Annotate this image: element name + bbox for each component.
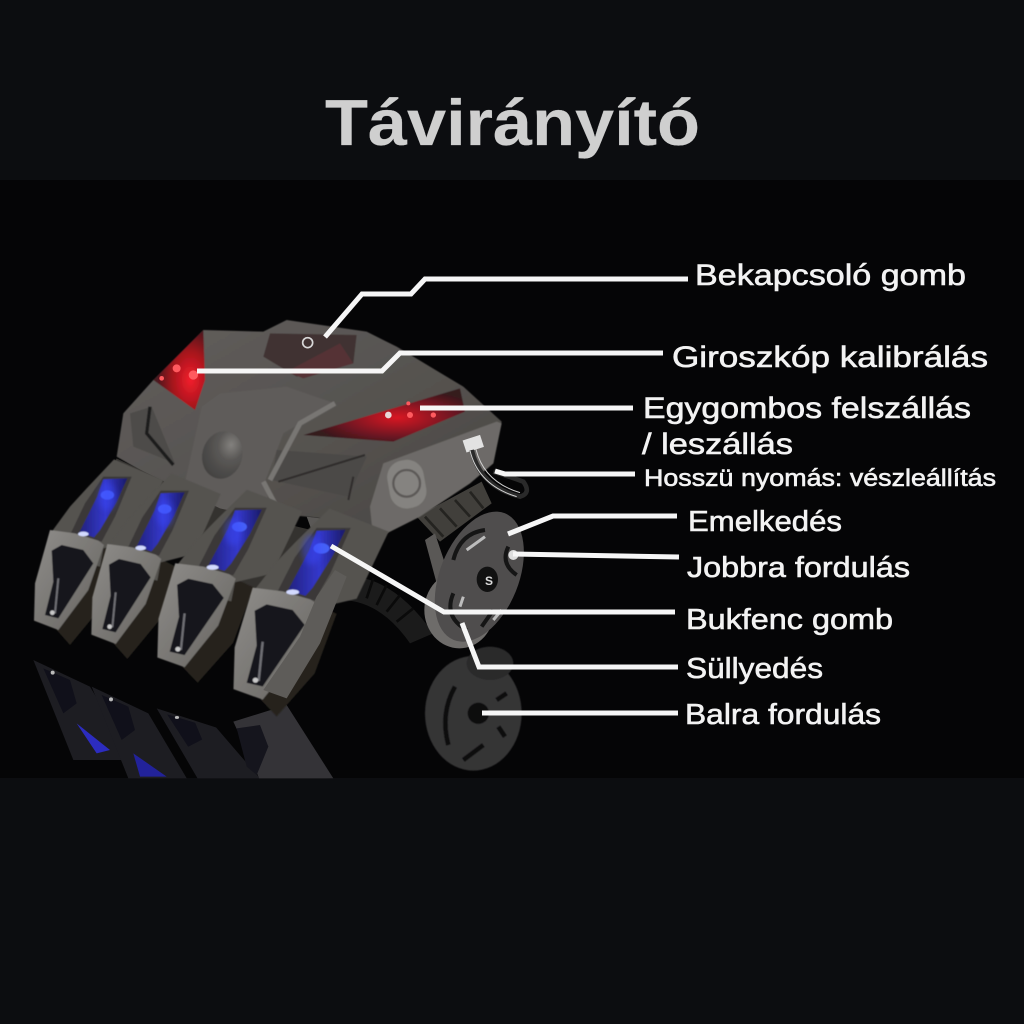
controller front disc bbox=[417, 499, 541, 655]
callout lines bbox=[197, 279, 688, 713]
line: turn right bbox=[513, 554, 679, 557]
red sparkle bbox=[159, 364, 436, 418]
label: emergency stop: Hosszü nyomás: vészleállítás bbox=[644, 465, 996, 492]
icon: power button bbox=[303, 338, 313, 348]
line: emergency stop bbox=[495, 471, 635, 474]
ribbed tube bbox=[340, 577, 433, 643]
left red light bbox=[153, 330, 205, 410]
labels bbox=[642, 259, 996, 731]
side round plate bbox=[385, 457, 429, 511]
line: flip button bbox=[331, 546, 675, 612]
label: gyro calibration: Giroszkóp kalibrálás bbox=[672, 341, 988, 374]
central dome bbox=[197, 427, 248, 483]
controller bracket bbox=[425, 533, 448, 583]
label: one-button takeoff: Egygombos felszállás bbox=[643, 392, 971, 425]
robot photo illustration bbox=[33, 320, 541, 787]
label: turn right: Jobbra fordulás bbox=[687, 552, 910, 584]
title: Távirányító bbox=[325, 86, 700, 159]
under-claw fill bbox=[87, 458, 353, 600]
label: landing: / leszállás bbox=[642, 428, 793, 461]
claw 1 bbox=[34, 459, 163, 645]
right red light bbox=[303, 388, 465, 442]
blue glow bbox=[99, 483, 321, 565]
line: takeoff landing bbox=[420, 406, 633, 410]
reflection of controller bbox=[425, 647, 522, 771]
line: power button bbox=[325, 279, 688, 337]
claw 4 side wall bbox=[263, 570, 347, 698]
main body bbox=[117, 320, 502, 540]
claw 2 bbox=[91, 473, 221, 659]
line: descend bbox=[462, 623, 678, 667]
label: ascend: Emelkedés bbox=[688, 506, 842, 538]
label: turn left: Balra fordulás bbox=[685, 699, 881, 731]
line: ascend bbox=[508, 516, 677, 534]
tread bbox=[417, 482, 492, 542]
label: descend: Süllyedés bbox=[686, 653, 823, 685]
photo band bbox=[0, 180, 1024, 778]
line: turn left bbox=[482, 710, 678, 716]
claw 4 bbox=[233, 508, 389, 716]
label: power button: Bekapcsoló gomb bbox=[695, 259, 966, 292]
controller back disc bbox=[424, 572, 494, 648]
line: gyro calibration bbox=[197, 353, 663, 371]
claw 3 bbox=[157, 490, 302, 683]
label: flip button: Bukfenc gomb bbox=[686, 604, 893, 636]
connector bbox=[463, 435, 484, 453]
reflection of claws bbox=[33, 660, 333, 787]
cable bbox=[470, 449, 527, 497]
controller front disc: S bbox=[485, 574, 493, 588]
claw arm joint bbox=[307, 517, 373, 570]
